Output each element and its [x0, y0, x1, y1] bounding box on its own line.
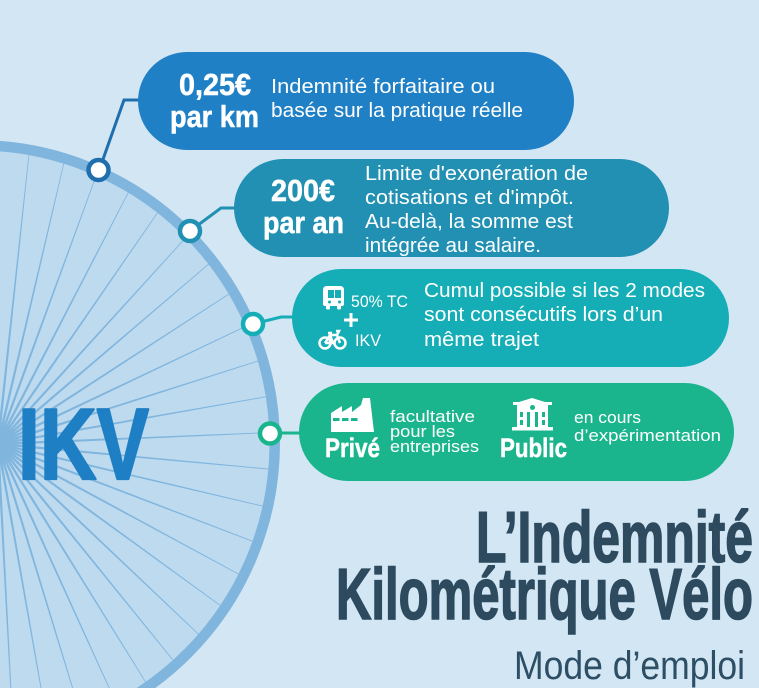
connector 3 [243, 314, 296, 334]
heading: Privé: Privé [325, 433, 380, 463]
text: flat-rate description [271, 76, 523, 122]
text: flat-rate description: basée sur la pratique réelle [271, 100, 523, 122]
text: exemption limit [365, 163, 588, 257]
text: being tested: en cours [574, 408, 641, 427]
panel: amount per km [138, 52, 574, 150]
icon: bicycle [320, 331, 346, 348]
icon: plus [344, 313, 358, 327]
heading: 200€ par an: 200€ [271, 173, 335, 208]
icon: factory [331, 398, 374, 432]
panel: annual limit [234, 159, 669, 257]
wheel rim [0, 145, 275, 688]
text: exemption limit: Au-delà, la somme est [365, 211, 573, 233]
text: IKV: IKV [355, 331, 382, 350]
text: optional for companies [390, 407, 479, 456]
title [336, 498, 753, 635]
connector 4 [260, 424, 302, 444]
wheel [0, 140, 280, 688]
icon: bus [323, 286, 344, 310]
heading: 200€ par an: par an [263, 205, 344, 240]
heading: 0,25€ par km: 0,25€ [179, 67, 251, 102]
text: flat-rate description: Indemnité forfaitaire ou [271, 76, 495, 98]
heading: 200€ par an [263, 173, 344, 240]
text: 50% TC: 50% TC [351, 292, 408, 311]
wheel spokes [0, 155, 268, 688]
panel: private and public sectors [299, 383, 734, 481]
icon: public building [512, 398, 553, 430]
text: cumul description: sont consécutifs lors d’un [424, 304, 663, 326]
wheel label: IKV: IKV [18, 389, 149, 501]
heading: 0,25€ par km: par km [170, 99, 259, 134]
text: cumul description: Cumul possible si les 2 modes [424, 280, 705, 302]
text: optional for companies: pour les [390, 422, 455, 441]
text: cumul description: même trajet [424, 329, 539, 351]
panel: combining modes [292, 269, 729, 367]
text: being tested: d’expérimentation [574, 426, 721, 445]
text: exemption limit: cotisations et d'impôt. [365, 187, 574, 209]
text: being tested [574, 408, 721, 445]
text: exemption limit: intégrée au salaire. [365, 235, 541, 257]
text: cumul description [424, 280, 705, 351]
text: exemption limit: Limite d'exonération de [365, 163, 588, 185]
connector 1 [88, 100, 142, 180]
connector 2 [180, 208, 238, 241]
text: optional for companies: facultative [390, 407, 475, 426]
text: optional for companies: entreprises [390, 437, 479, 456]
heading: Public: Public [500, 433, 567, 463]
heading: 0,25€ par km [170, 67, 259, 134]
